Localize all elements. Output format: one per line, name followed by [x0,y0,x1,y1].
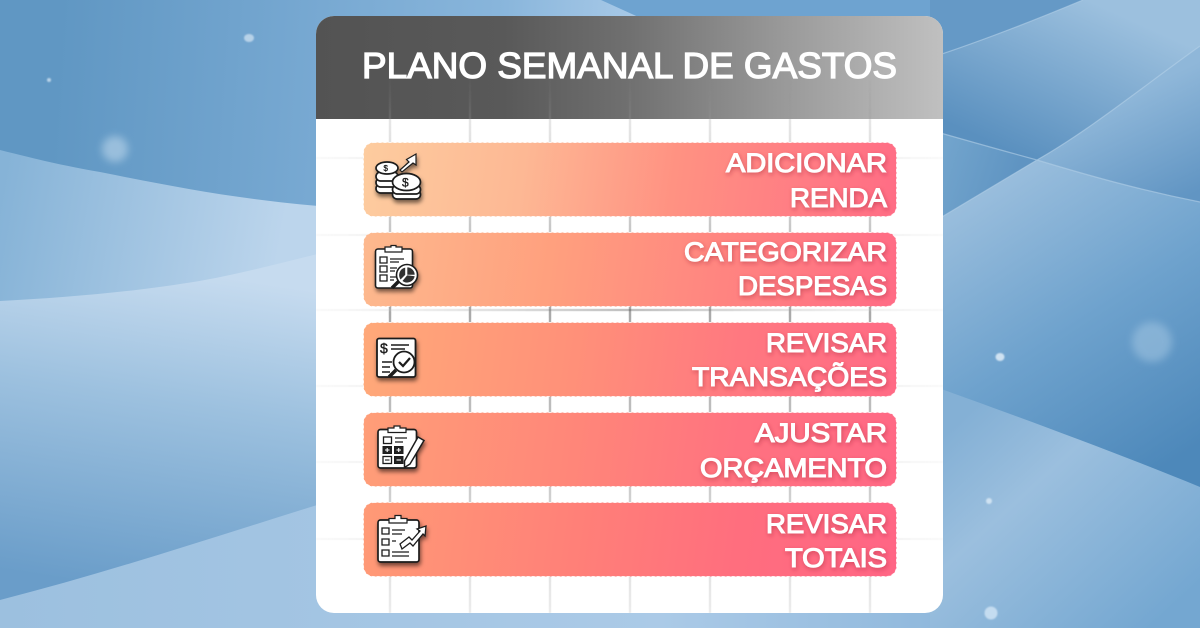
icon: calculator clipboard with pencil [378,426,424,468]
icon: coins with arrow: $ [402,176,409,190]
icon: coins with arrow: $ [384,164,388,173]
header bar [316,16,943,119]
label: TOTAIS [785,543,887,573]
label: CATEGORIZAR [684,237,887,267]
label: TRANSAÇÕES [692,361,887,392]
label: RENDA [790,183,887,213]
label [692,328,887,392]
label: REVISAR [766,328,887,358]
row: revisar totais [364,502,896,576]
row: adicionar renda [364,142,896,216]
label: AJUSTAR [755,418,887,448]
row: revisar transacoes [364,322,896,396]
panel: plano semanal card [316,16,943,613]
row: categorizar despesas [364,232,896,306]
label: ORÇAMENTO [700,453,887,483]
label [726,148,887,213]
title: PLANO SEMANAL DE GASTOS [362,45,897,86]
icon: clipboard with pie chart [376,246,418,288]
icon: coins with arrow [376,154,420,199]
background grid [316,80,943,613]
label: DESPESAS [738,271,887,301]
icon: checklist with rising arrow [378,516,426,562]
label [700,418,887,483]
icon: document with magnifier [377,338,416,377]
row: ajustar orcamento [364,412,896,486]
label [684,237,887,301]
icon: document with magnifier: $ [380,340,388,356]
label [766,509,887,573]
label: REVISAR [766,509,887,539]
label: ADICIONAR [726,148,887,178]
